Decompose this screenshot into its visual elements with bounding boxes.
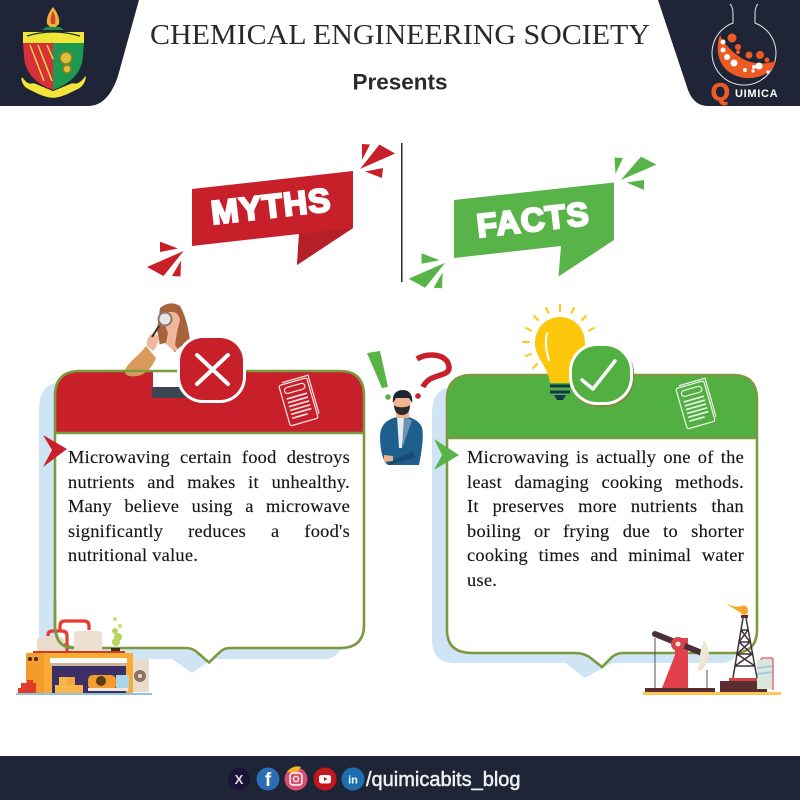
logo wordmark: UIMICA (735, 88, 778, 100)
header right dark panel (658, 0, 800, 106)
text block: myth: significantly reduces a food's (68, 520, 350, 540)
icon: check badge (569, 343, 634, 407)
facts banner (454, 182, 614, 276)
text block: fact: Microwaving is actually one of the (467, 447, 744, 467)
myths card outline (55, 371, 364, 662)
logo wordmark (711, 79, 778, 106)
myths sparks (147, 144, 395, 276)
green pipe overlap (55, 600, 74, 648)
factory illustration (16, 600, 152, 695)
subtitle: Presents (352, 70, 448, 94)
text block: myth: nutrients and makes it unhealthy. (68, 472, 350, 492)
panel: myths backing shape (39, 383, 342, 673)
man figure (380, 390, 423, 465)
panel: facts card (447, 375, 757, 667)
icon: YouTube (314, 768, 336, 790)
footer band (0, 756, 800, 800)
icon: Instagram (284, 766, 308, 790)
social icons (228, 766, 364, 791)
question mark (415, 355, 449, 399)
myths label: MYTHS (209, 181, 333, 231)
icon: cross badge (177, 335, 246, 403)
myths card red header (55, 371, 364, 433)
icon: light bulb (523, 305, 594, 400)
facts card outline (447, 375, 757, 667)
text block: myth (68, 447, 350, 565)
icon: Quimica flask logo (711, 4, 778, 106)
facts sparks (409, 157, 656, 288)
text block: myth: nutritional value. (68, 545, 198, 565)
thinking man (367, 351, 449, 465)
icon: document myths (278, 375, 320, 426)
myths arrow (43, 435, 67, 467)
panel: facts backing shape (432, 388, 738, 678)
facts arrow (434, 439, 459, 470)
woman with magnifying glass (125, 303, 190, 398)
panel: myths card (55, 303, 364, 662)
logo wordmark: Q (711, 79, 730, 106)
text block: fact: use. (467, 570, 497, 590)
facts card green header (447, 375, 757, 438)
social handle: /quimicabits_blog (366, 769, 521, 791)
myths banner (192, 171, 353, 265)
text block: fact: least damaging cooking methods. (467, 472, 744, 492)
text block: fact: It preserves more nutrients than (467, 496, 744, 516)
exclamation mark (367, 351, 391, 400)
text block: fact: boiling or frying due to shorter (467, 520, 744, 540)
icon: LinkedIn: in (348, 774, 358, 786)
oil rig illustration (643, 603, 781, 695)
text block: myth: Many believe using a microwave (68, 496, 350, 516)
icon: document facts (675, 378, 717, 429)
text block: myth: Microwaving certain food destroys (68, 447, 350, 467)
title: CHEMICAL ENGINEERING SOCIETY (150, 20, 650, 51)
text block: fact: cooking times and minimal water (467, 545, 744, 565)
centre divider (401, 143, 402, 282)
facts label: FACTS (475, 195, 591, 244)
text block: fact (466, 447, 744, 590)
icon: Facebook: f (265, 770, 272, 791)
header left dark panel (0, 0, 139, 106)
icon: X: X (235, 772, 244, 787)
icon: college crest (22, 7, 85, 97)
